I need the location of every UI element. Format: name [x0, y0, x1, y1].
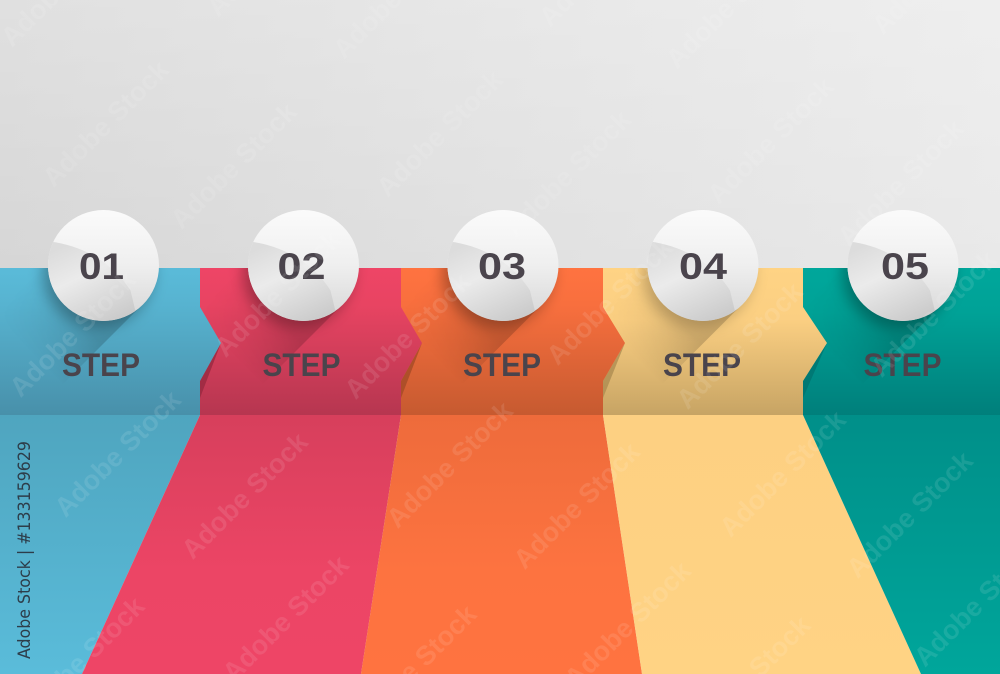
circle badge 03: 03	[478, 246, 526, 287]
stock watermarks: Adobe Stock	[865, 244, 1000, 383]
stock watermarks: Adobe Stock	[209, 224, 347, 363]
circle badge 03	[448, 210, 558, 321]
circle badge 05	[848, 210, 958, 321]
stock watermarks: Adobe Stock	[671, 276, 809, 415]
circle badge 01: 01	[79, 246, 124, 287]
panel: step 02 band	[200, 268, 422, 415]
stock watermarks: Adobe Stock	[4, 264, 142, 403]
vertical stock id caption: Adobe Stock | #133159629	[15, 441, 35, 659]
stock watermarks: Adobe Stock	[37, 54, 175, 193]
stripe: yellow	[603, 415, 921, 674]
stock watermarks: Adobe Stock	[702, 71, 840, 210]
stock watermarks: Adobe Stock	[176, 426, 314, 565]
circle badge 04	[648, 210, 758, 321]
stock watermarks: Adobe Stock	[339, 266, 477, 405]
panel: step 03 band	[401, 268, 625, 415]
label: STEP 4: STEP	[663, 347, 741, 383]
stock watermarks: Adobe Stock	[371, 64, 509, 203]
circle badge 02	[248, 210, 359, 321]
stock watermarks: Adobe Stock	[541, 232, 679, 371]
stripe: orange	[361, 415, 642, 674]
stock watermarks: Adobe Stock	[49, 384, 187, 523]
stock watermarks: Adobe Stock	[499, 104, 637, 243]
grey background panel	[0, 0, 1000, 268]
stock watermarks: Adobe Stock	[165, 96, 303, 235]
stripe: red	[82, 415, 401, 674]
circle badge 01	[48, 210, 159, 321]
stock watermarks: Adobe Stock	[714, 404, 852, 543]
label: STEP 1: STEP	[62, 347, 140, 383]
circle badge 05: 05	[881, 246, 929, 287]
stripe: blue	[0, 415, 200, 674]
label: STEP 2: STEP	[262, 347, 340, 383]
stock watermarks: Adobe Stock	[381, 395, 519, 534]
stock watermarks: Adobe Stock	[832, 113, 970, 252]
label: STEP 5: STEP	[864, 347, 942, 383]
circle badge 04: 04	[679, 246, 727, 287]
stock watermarks: Adobe Stock	[508, 436, 646, 575]
panel: step 05 band	[803, 268, 1000, 415]
panel: step 04 band	[603, 268, 827, 415]
label: STEP 3: STEP	[463, 347, 541, 383]
stock watermarks: Adobe Stock	[841, 445, 979, 584]
panel: step 01 band	[0, 268, 221, 415]
lower perspective stripes	[0, 415, 1000, 674]
stripe: teal	[803, 415, 1000, 674]
circle badge 02: 02	[278, 246, 326, 287]
